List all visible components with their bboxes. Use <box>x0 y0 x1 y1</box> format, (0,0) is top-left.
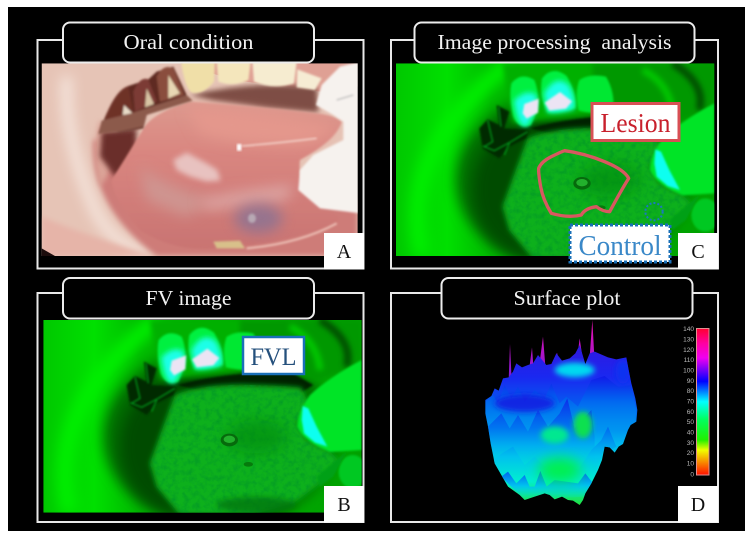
color scale bar: 100 <box>683 368 694 374</box>
letter tag C <box>678 233 718 270</box>
color scale bar: 130 <box>683 336 694 344</box>
teeth <box>181 62 322 93</box>
lesion outline <box>539 151 629 216</box>
color scale bar: 40 <box>687 430 694 436</box>
3D surface plot <box>485 320 637 505</box>
title pill: Oral condition: Oral condition <box>124 30 254 54</box>
control region circle <box>645 203 663 220</box>
gold crowns <box>98 67 193 134</box>
color scale bar: 70 <box>687 398 694 406</box>
color scale bar: 10 <box>687 460 694 468</box>
panel frame D <box>391 293 718 522</box>
title pill: FV image <box>63 278 314 318</box>
green fluorescence image <box>43 320 367 527</box>
panel: FV image <box>38 278 367 527</box>
title pill: FV image: FV image <box>146 286 232 310</box>
label: Lesion <box>592 104 679 140</box>
title pill: Image processing analysis <box>414 22 694 62</box>
color scale bar: 30 <box>687 440 694 447</box>
panel frame B <box>38 293 364 522</box>
label: Lesion: Lesion <box>600 108 671 138</box>
color scale bar <box>683 326 709 478</box>
letter tag B <box>324 486 364 522</box>
letter tag D: D <box>691 494 705 516</box>
letter tag C: C <box>691 241 705 263</box>
panel: image processing analysis <box>391 22 719 270</box>
color scale bar: 110 <box>684 357 694 364</box>
label: FVL: FVL <box>250 344 296 371</box>
color scale bar: 20 <box>687 450 694 457</box>
color scale bar: 50 <box>687 419 694 426</box>
letter tag A <box>324 233 364 270</box>
panel frame A <box>38 40 364 268</box>
title pill: Surface plot: Surface plot <box>514 286 621 310</box>
color scale bar: 140 <box>683 326 694 333</box>
surface ridges and colour blotches <box>485 360 636 500</box>
letter tag A: A <box>337 241 352 263</box>
label: Control: Control <box>578 231 662 262</box>
green fluorescence image with regions <box>396 63 719 270</box>
glove <box>298 62 360 213</box>
label: FVL <box>243 337 304 374</box>
letter tag B: B <box>337 494 351 516</box>
color scale bar: 60 <box>687 409 694 416</box>
color scale bar: 120 <box>683 347 694 354</box>
color scale bar: 0 <box>690 472 694 478</box>
color scale bar: 90 <box>687 378 694 385</box>
panel frame C <box>391 40 718 268</box>
title pill: Oral condition <box>63 22 314 62</box>
title pill: Image processing analysis: Image processing analysis <box>438 30 672 54</box>
panel: oral condition <box>38 22 364 270</box>
color scale bar: 80 <box>687 388 694 395</box>
title pill: Surface plot <box>442 278 692 318</box>
panel: surface plot <box>391 278 718 522</box>
letter tag D <box>678 486 718 522</box>
intraoral photograph <box>42 62 360 256</box>
